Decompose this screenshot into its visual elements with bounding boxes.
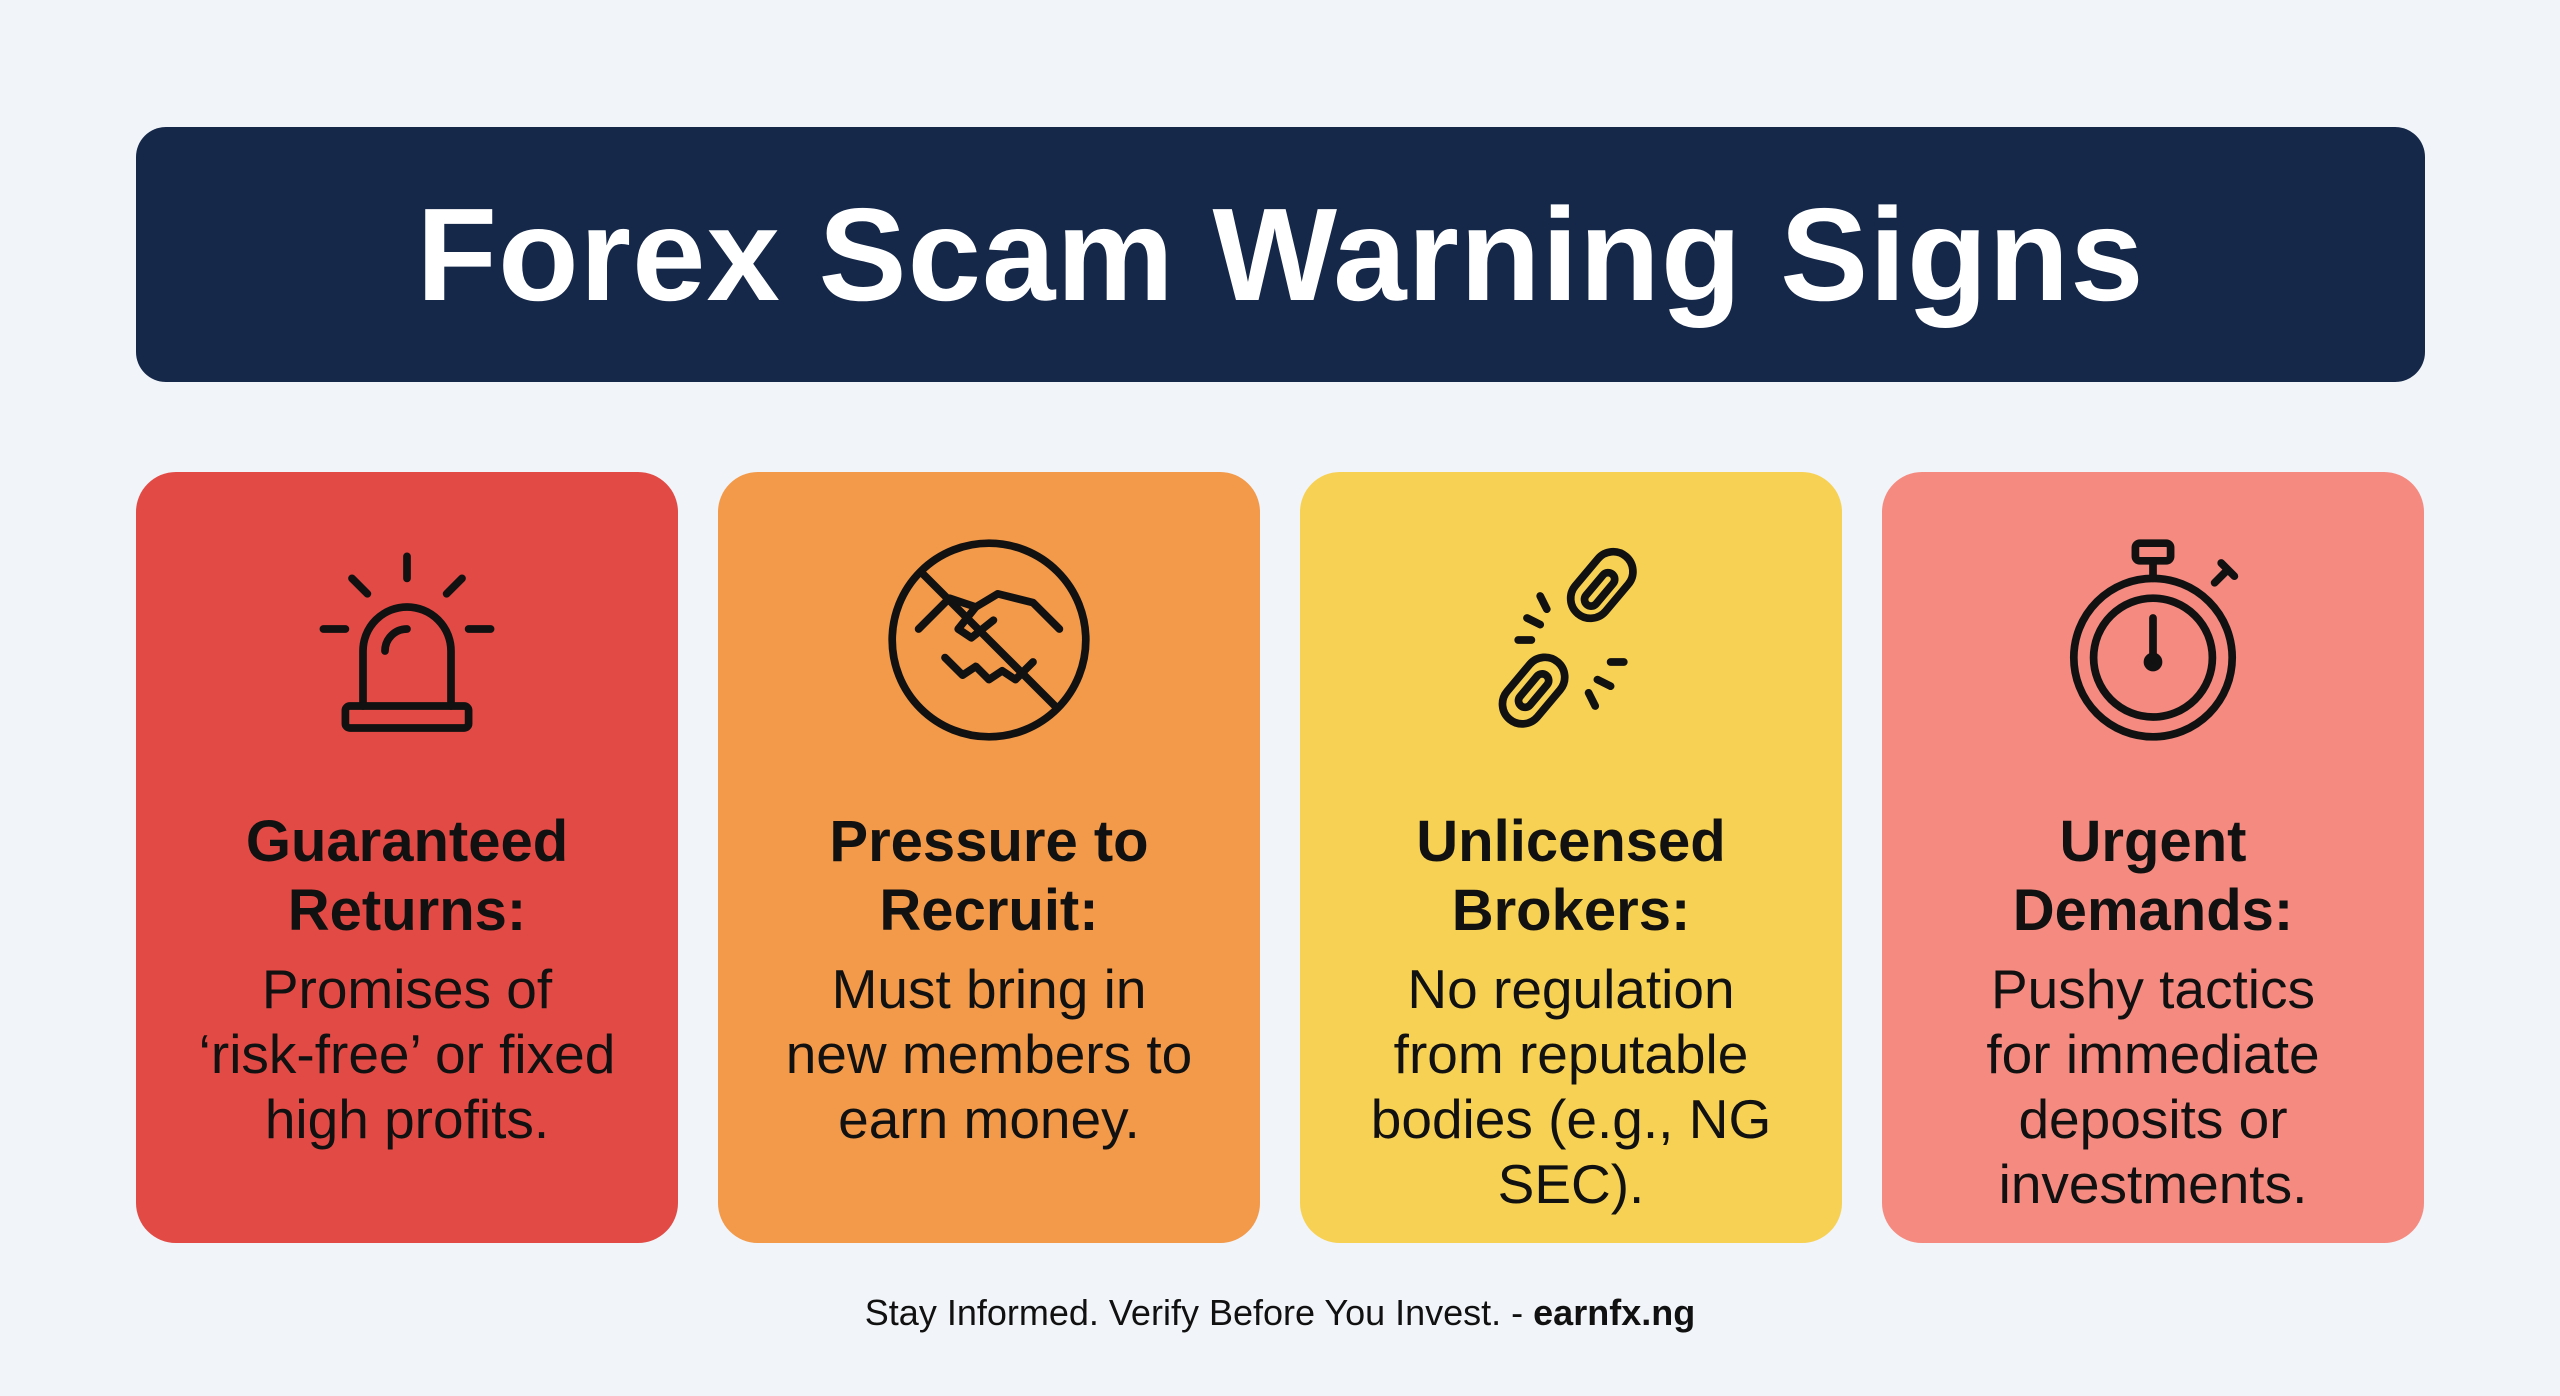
icon: siren <box>320 552 494 732</box>
text: investments. <box>1999 1153 2307 1215</box>
text: bodies (e.g., NG <box>1371 1088 1771 1150</box>
heading: Recruit: <box>879 878 1099 943</box>
text: deposits or <box>2018 1088 2288 1150</box>
panel: unlicensed brokers <box>1300 472 1842 1243</box>
text <box>1986 958 2320 1215</box>
heading: Returns: <box>288 878 526 943</box>
text <box>1371 958 1771 1215</box>
text: SEC). <box>1498 1153 1644 1215</box>
heading: Pressure to <box>829 809 1149 874</box>
heading: Guaranteed <box>246 809 568 874</box>
icon: stopwatch <box>2070 539 2238 741</box>
text: new members to <box>786 1023 1192 1085</box>
title <box>136 127 2425 382</box>
panel: urgent demands <box>1882 472 2424 1243</box>
text: for immediate <box>1986 1023 2320 1085</box>
text: from reputable <box>1394 1023 1748 1085</box>
heading: Unlicensed <box>1416 809 1726 874</box>
text: ‘risk-free’ or fixed <box>199 1023 615 1085</box>
icon: no handshake <box>888 539 1090 741</box>
panel: guaranteed returns <box>136 472 678 1243</box>
text <box>199 958 615 1150</box>
footer: Stay Informed. Verify Before You Invest. - earnfx.ng <box>865 1292 1695 1333</box>
text: No regulation <box>1407 958 1735 1020</box>
text: Promises of <box>262 958 552 1020</box>
heading <box>829 809 1149 943</box>
heading: Brokers: <box>1452 878 1690 943</box>
text: high profits. <box>265 1088 549 1150</box>
heading <box>1416 809 1726 943</box>
heading <box>2013 809 2293 943</box>
panel: pressure to recruit <box>718 472 1260 1243</box>
icon: broken chain <box>1498 548 1637 728</box>
heading <box>246 809 568 943</box>
heading: Demands: <box>2013 878 2293 943</box>
text: earn money. <box>838 1088 1140 1150</box>
text: Must bring in <box>832 958 1146 1020</box>
text <box>786 958 1192 1150</box>
heading: Urgent <box>2060 809 2246 874</box>
text: Pushy tactics <box>1991 958 2315 1020</box>
title: Forex Scam Warning Signs <box>416 181 2145 328</box>
